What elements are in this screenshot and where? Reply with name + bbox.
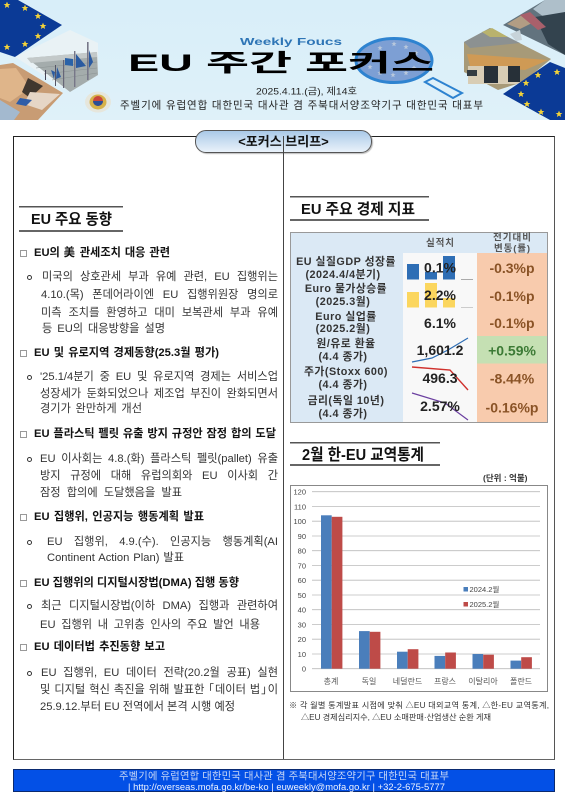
row labels: Euro 물가상승률 xyxy=(305,281,387,295)
heading: EU main trends: EU 주요 동향 xyxy=(31,211,112,228)
panel: EU main trends xyxy=(19,206,123,232)
item 2: economic trends: 경기가 완만하게 개선 xyxy=(40,403,142,415)
row labels: 금리(독일 10년) xyxy=(308,393,384,407)
category labels: 총계 xyxy=(324,676,338,686)
actual values: 1,601.2 xyxy=(417,342,464,358)
change values: -0.1%p xyxy=(489,315,535,331)
category labels: 폴란드 xyxy=(510,676,532,686)
item 5: DMA: 최근 디지털시장법(이하 DMA) 집행과 관련하여 xyxy=(41,600,278,612)
y axis labels: 40 xyxy=(298,606,306,614)
heading: EU main trends xyxy=(19,206,123,232)
item 1: tariff response: 4.10.(목) 폰데어라이엔 EU 집행위원장 명의로 xyxy=(41,289,278,301)
subtitle: Weekly Foucs xyxy=(240,36,342,48)
item 6: Data Act xyxy=(20,640,278,713)
right chamber photo xyxy=(464,28,551,90)
actual values: 6.1% xyxy=(424,315,457,331)
2024.2 bars xyxy=(321,515,521,669)
y axis labels: 90 xyxy=(298,532,306,541)
change values: -8.44% xyxy=(490,370,535,386)
change values: -0.1%p xyxy=(489,288,535,304)
item 2: economic trends xyxy=(20,346,278,415)
row labels: (2025.2월) xyxy=(316,321,370,335)
item 1: tariff response: EU의 美 관세조치 대응 관련 xyxy=(34,247,170,259)
heading: key economic indicators xyxy=(290,196,429,221)
item 5: DMA: EU 집행위의 디지털시장법(DMA) 집행 동향 xyxy=(34,577,239,589)
table column headers: 실적치 xyxy=(426,237,454,249)
right parliament photo xyxy=(503,0,565,55)
column divider xyxy=(283,136,284,759)
row labels: (4.4 종가) xyxy=(318,406,368,420)
item 6: Data Act: 및 디지털 혁신 촉진을 위해 발표한 ｢데이터 법｣이 xyxy=(40,684,278,696)
bar chart: Korea-EU trade xyxy=(290,485,548,692)
item 5: DMA: EU 집행위 내 고위층 인사의 주요 발언 내용 xyxy=(40,619,260,631)
y axis labels: 110 xyxy=(294,502,306,511)
footnote: △EU 경제심리지수, △EU 소매판매·산업생산 순환 게재 xyxy=(301,712,491,722)
item 3: plastic pellets: 방지 규정에 대해 유럽의회와 EU 이사회 간 xyxy=(40,470,278,482)
item 6: Data Act: EU 집행위, EU 데이터 전략(20.2월 공표) 실현 xyxy=(41,667,278,679)
change values: -0.16%p xyxy=(486,400,538,416)
y axis labels xyxy=(293,488,306,674)
category labels: 네덜란드 xyxy=(393,676,422,686)
table column headers: 변동(률) xyxy=(494,244,530,254)
emblem xyxy=(85,92,111,112)
category labels: 프랑스 xyxy=(434,676,456,686)
item 5: DMA xyxy=(20,576,278,631)
actual values: 2.57% xyxy=(420,398,460,414)
section pill: focus brief xyxy=(195,130,372,153)
organisation: 주벨기에 유럽연합 대한민국 대사관 겸 주북대서양조약기구 대한민국 대표부 xyxy=(120,98,483,112)
y axis labels: 80 xyxy=(298,546,306,556)
issue date: 2025.4.11.(금), 제14호 xyxy=(256,86,357,98)
indicator table xyxy=(290,232,548,423)
item 1: tariff response: 등 EU의 대응방향을 설명 xyxy=(42,323,165,335)
item 4: AI action plan: EU 집행위, 4.9.(수). 인공지능 행동계획(AI xyxy=(47,536,278,548)
category labels: 이탈리아 xyxy=(468,676,498,686)
title: EU 주간 포커스 xyxy=(128,50,434,77)
y axis labels: 70 xyxy=(298,561,306,570)
euro banknotes photo xyxy=(0,63,63,120)
item 3: plastic pellets: EU 이사회는 4.8.(화) 플라스틱 펠릿(pallet) 유출 xyxy=(40,453,278,465)
table column headers: 전기대비 xyxy=(493,232,531,244)
row labels: (4.4 종가) xyxy=(318,377,368,391)
y axis labels: 10 xyxy=(298,650,306,659)
row labels xyxy=(296,255,396,420)
item 4: AI action plan: EU 집행위, 인공지능 행동계획 발표 xyxy=(34,511,204,523)
unit note: (단위 : 억불) xyxy=(483,473,528,483)
category labels xyxy=(324,676,532,686)
footnote: ※ 각 월별 통계발표 시점에 맞춰 △EU 대외교역 통계, △한-EU 교역통계, xyxy=(289,700,549,710)
item 1: tariff response: 미측 조치를 환영하고 대미 보복관세 부과 유예 xyxy=(41,307,278,319)
2025.2 bars xyxy=(332,517,532,669)
item 2: economic trends: 성장세가 둔화되었으나 제조업 부진이 완화되면서 xyxy=(40,388,278,400)
mini charts xyxy=(407,256,473,420)
building photo xyxy=(15,30,98,92)
item 3: plastic pellets xyxy=(20,427,278,499)
item 3: plastic pellets: EU 플라스틱 펠릿 유출 방지 규정안 잠정 합의 도달 xyxy=(34,428,276,440)
category labels: 독일 xyxy=(362,677,376,686)
section pill: focus brief: <포커스 브리프> xyxy=(238,134,329,149)
footer bar: 주벨기에 유럽연합 대한민국 대사관 겸 주북대서양조약기구 대한민국 대표부 xyxy=(119,770,449,782)
y axis labels: 30 xyxy=(298,620,306,629)
y axis labels: 50 xyxy=(298,591,306,600)
item 1: tariff response: 미국의 상호관세 부과 유예 관련, EU 집행위는 xyxy=(42,271,278,283)
item 2: economic trends: '25.1/4분기 중 EU 및 유로지역 경제는 서비스업 xyxy=(40,371,278,383)
change values xyxy=(486,260,538,416)
actual values: 2.2% xyxy=(424,287,457,303)
table column headers xyxy=(426,232,531,254)
row labels: Euro 실업률 xyxy=(315,310,377,323)
legend: 2024.2월 xyxy=(470,584,499,594)
item 1: tariff response xyxy=(20,246,278,335)
left EU flag diamond xyxy=(0,0,62,57)
y axis labels: 60 xyxy=(298,576,306,585)
legend: 2025.2월 xyxy=(470,599,499,609)
footer bar: | http://overseas.mofa.go.kr/be-ko | euweekly@mofa.go.kr | +32-2-675-5777 xyxy=(128,781,445,792)
item 4: AI action plan: Continent Action Plan) 발표 xyxy=(47,552,184,564)
magnifier body xyxy=(356,38,432,82)
item 2: economic trends: EU 및 유로지역 경제동향(25.3월 평가) xyxy=(34,347,219,359)
footer bar xyxy=(13,769,555,792)
row labels: (2025.3월) xyxy=(316,294,370,308)
item 6: Data Act: 25.9.12.부터 EU 전역에서 본격 시행 예정 xyxy=(40,701,235,713)
row labels: (2024.4/4분기) xyxy=(305,267,381,281)
heading: Korea-EU trade: 2월 한-EU 교역통계 xyxy=(302,446,424,464)
y axis labels: 120 xyxy=(293,488,306,496)
y axis labels: 20 xyxy=(298,635,306,644)
row labels: EU 실질GDP 성장률 xyxy=(296,255,396,268)
item 4: AI action plan xyxy=(20,510,278,564)
actual values xyxy=(417,260,464,414)
heading: key economic indicators: EU 주요 경제 지표 xyxy=(301,201,415,218)
y axis labels: 0 xyxy=(302,664,306,674)
row labels: (4.4 종가) xyxy=(318,349,368,363)
header banner xyxy=(0,0,565,120)
y axis labels: 100 xyxy=(293,517,306,526)
item 3: plastic pellets: 잠정 합의에 도달했음을 발표 xyxy=(40,487,182,499)
change values: +0.59% xyxy=(488,342,536,358)
magnifier handle xyxy=(425,78,462,98)
actual values: 0.1% xyxy=(424,260,457,276)
row labels: 원/유로 환율 xyxy=(316,336,376,350)
main frame xyxy=(13,136,555,760)
actual values: 496.3 xyxy=(422,370,458,386)
right EU flag diamond xyxy=(503,62,565,120)
change values: -0.3%p xyxy=(489,260,535,276)
row labels: 주가(Stoxx 600) xyxy=(304,364,388,378)
footnote xyxy=(289,700,549,722)
legend xyxy=(464,584,499,609)
item 6: Data Act: EU 데이터법 추진동향 보고 xyxy=(34,641,165,653)
